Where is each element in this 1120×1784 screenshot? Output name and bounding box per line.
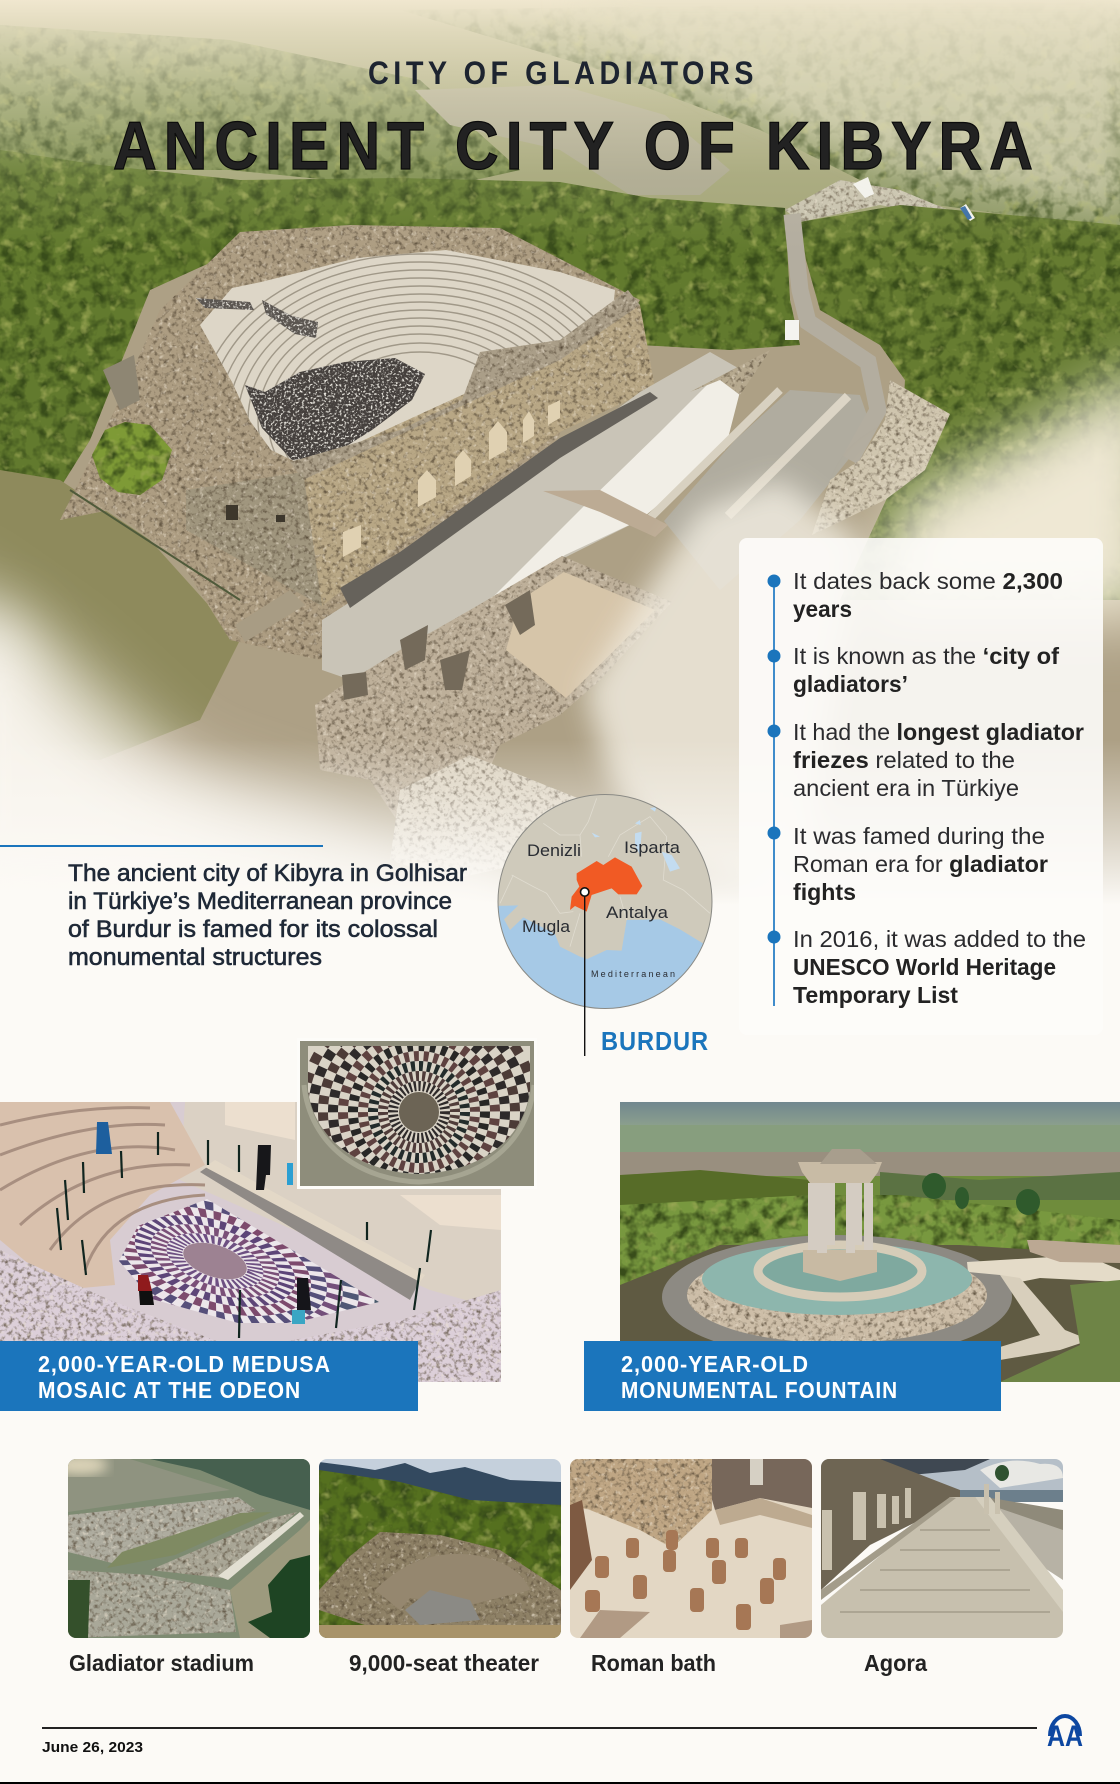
grass (620, 1195, 1120, 1285)
dirt area around the theatre (60, 225, 640, 660)
wooden walkway (543, 490, 668, 537)
horizon land (950, 1490, 1063, 1502)
timeline line (773, 580, 775, 1006)
centre right haze (585, 480, 860, 900)
bottom black bar (0, 1782, 1120, 1784)
main forest left (0, 150, 800, 520)
intro text: in Türkiye’s Mediterranean province (68, 888, 452, 915)
tree (92, 422, 172, 495)
intro text (68, 860, 467, 971)
photo: Roman bath (570, 1459, 812, 1638)
rotunda top (798, 1162, 882, 1183)
intro text: monumental structures (68, 944, 322, 971)
intro text: The ancient city of Kibyra in Golhisar (68, 860, 467, 887)
panel background (739, 538, 1103, 1035)
low walls by road (728, 396, 848, 516)
terrace (506, 572, 655, 698)
wall top rubble (290, 290, 640, 480)
white column stub (750, 1459, 763, 1485)
fact 3 (793, 719, 1084, 801)
town (620, 1152, 1120, 1176)
lakes (592, 807, 680, 872)
timeline dots (768, 574, 780, 944)
upper steps (0, 1102, 205, 1290)
main aerial photo of the odeon and surrounding forest (0, 0, 1120, 920)
upper left wooded slope (0, 25, 520, 190)
frieze wall (200, 1165, 420, 1300)
caption: Medusa mosaic: 2,000-YEAR-OLD MEDUSA (38, 1351, 331, 1377)
map labels: Isparta (624, 838, 681, 857)
arches (343, 400, 560, 557)
land (498, 795, 712, 959)
left wall (821, 1459, 960, 1590)
inner ring (758, 1245, 922, 1297)
map labels: Mediterranean (591, 969, 675, 979)
people (96, 1122, 112, 1154)
pedestal (803, 1250, 877, 1281)
near hill left (620, 1170, 810, 1205)
curved border of the dome (304, 1085, 534, 1182)
wall right face (303, 305, 655, 606)
mosaic semicircle (308, 1046, 530, 1174)
east seating (150, 1512, 297, 1578)
map outline (498, 794, 712, 1008)
right curb (975, 1497, 1063, 1612)
columns (822, 1484, 1000, 1570)
ruins right (967, 1255, 1120, 1282)
map labels (522, 838, 681, 979)
wall shadow strip (340, 392, 658, 608)
far hillside (0, 0, 1120, 240)
seating tiers (375, 1554, 530, 1610)
photo: Medusa mosaic at the odeon (0, 1102, 501, 1394)
right wall (985, 1497, 1063, 1535)
top haze (0, 0, 1120, 250)
fact 1: It dates back some 2,300 (793, 568, 1063, 594)
sea (498, 905, 703, 1008)
plaza floor (180, 1102, 501, 1310)
rock pile (103, 355, 140, 410)
tree (995, 1465, 1009, 1481)
stone wall (570, 1459, 712, 1548)
grass base (620, 1176, 1120, 1285)
caption: Agora: Agora (864, 1650, 927, 1676)
caption: Medusa mosaic (0, 1341, 418, 1411)
ruin shadows (342, 590, 535, 700)
grass lower-left (0, 470, 240, 760)
fact 3: ancient era in Türkiye (793, 775, 1019, 801)
Burdur label: BURDUR (601, 1028, 709, 1056)
photo: monumental fountain (620, 1102, 1120, 1382)
dome (820, 1149, 877, 1164)
map labels: Mugla (522, 917, 571, 936)
fact 5 (793, 926, 1086, 1008)
right gravel (990, 1505, 1063, 1580)
panel: key facts (739, 538, 1103, 1035)
upper crowd (196, 298, 318, 338)
infield (107, 1512, 272, 1568)
lower haze left (0, 620, 530, 1120)
intro text: of Burdur is famed for its colossal (68, 916, 438, 943)
AA logo: AA (1047, 1720, 1083, 1753)
footer rule (42, 1727, 1037, 1729)
valley fields (620, 1125, 1120, 1152)
locator map (498, 794, 712, 1009)
columns (808, 1183, 873, 1253)
accent line above intro (0, 845, 323, 847)
parked vehicles (785, 177, 975, 340)
caption: 9,000-seat theater: 9,000-seat theater (349, 1650, 539, 1676)
fact 5: In 2016, it was added to the (793, 926, 1086, 952)
fact 3: It had the longest gladiator (793, 719, 1084, 745)
rubble curve (715, 1498, 812, 1528)
parked area rubble (785, 180, 985, 225)
plaza (322, 352, 745, 690)
caption: Medusa mosaic: MOSAIC AT THE ODEON (38, 1377, 301, 1403)
caption: monumental fountain: MONUMENTAL FOUNTAIN (621, 1377, 898, 1403)
fact 4 (793, 823, 1048, 905)
hypocaust pillars (585, 1530, 786, 1630)
photo: 9,000-seat theater (319, 1459, 561, 1638)
sky (821, 1459, 1063, 1499)
paved street (821, 1497, 1063, 1638)
ruin rubble complex (315, 556, 672, 855)
road (792, 214, 878, 460)
fact 4: fights (793, 879, 856, 905)
kicker heading: CITY OF GLADIATORS (368, 55, 758, 91)
forest hill (319, 1470, 561, 1638)
dark trees right (248, 1555, 310, 1638)
bright plaza highlight (490, 372, 745, 600)
bottom stones (580, 1610, 812, 1638)
lower ground (620, 1245, 1120, 1382)
map labels: Antalya (606, 903, 669, 922)
solid lower background (0, 904, 1120, 1784)
rubble orchestra (405, 1590, 480, 1625)
caption: Roman bath: Roman bath (591, 1650, 716, 1676)
mountains (319, 1462, 561, 1505)
stanchions (57, 1132, 431, 1338)
sky and mountains (620, 1102, 1120, 1125)
fact 1 (793, 568, 1063, 622)
caption: monumental fountain: 2,000-YEAR-OLD (621, 1351, 809, 1377)
fountain outer wall (687, 1272, 987, 1341)
left curb (821, 1497, 956, 1600)
west ruins (68, 1570, 236, 1638)
province borders (500, 798, 710, 947)
mosaic floor (119, 1199, 379, 1323)
lower white blocks (390, 755, 620, 880)
upper right hazy forest (400, 0, 1120, 230)
lower lavender steps (0, 1250, 501, 1382)
fact 3: friezes related to the (793, 747, 1015, 773)
seating slope (68, 1497, 256, 1563)
right haze over forest (860, 360, 1120, 620)
distant green hills (150, 1459, 310, 1510)
upper right extra haze (560, 0, 1120, 210)
cypress trees (922, 1173, 1040, 1215)
gravel path (662, 1235, 1012, 1341)
bottom fade (0, 740, 1120, 905)
fact 5: UNESCO World Heritage (793, 954, 1056, 980)
far stadium (415, 85, 730, 195)
theatre bowl (319, 1532, 561, 1634)
near hill right (880, 1172, 1120, 1200)
sun glow (52, 1455, 108, 1475)
inset photo: Medusa mosaic close-up (297, 1041, 534, 1189)
Burdur pointer line and marker (580, 888, 589, 1056)
dirt background (700, 1459, 812, 1510)
wall windows (226, 505, 285, 522)
caption: monumental fountain (584, 1341, 1001, 1411)
main forest right (800, 205, 1120, 600)
photo: agora (821, 1459, 1063, 1638)
fact 2 (793, 643, 1059, 697)
main crowd (245, 358, 425, 460)
lower left shrub (68, 1580, 90, 1638)
fact 2: It is known as the ‘city of (793, 643, 1059, 669)
pool (702, 1243, 972, 1315)
fact 5: Temporary List (793, 982, 958, 1008)
flagstone joints (840, 1530, 1050, 1612)
fence and shadow (70, 490, 240, 600)
fact 4: It was famed during the (793, 823, 1045, 849)
date: June 26, 2023 (42, 1739, 143, 1756)
ground base (0, 0, 1120, 920)
fact 2: gladiators’ (793, 671, 908, 697)
east wall (218, 1512, 304, 1580)
lower left soft haze (0, 560, 420, 920)
grey service area (664, 390, 872, 590)
map labels: Denizli (527, 841, 581, 860)
Burdur province (570, 857, 642, 912)
fact 4: Roman era for gladiator (793, 851, 1048, 877)
cavea seating (200, 250, 615, 461)
steps at base (235, 590, 305, 642)
foreground sand (319, 1625, 561, 1638)
right slope (230, 1520, 310, 1638)
caption: Gladiator stadium: Gladiator stadium (69, 1650, 254, 1676)
photo: gladiator stadium (52, 1455, 310, 1638)
back marble blocks (225, 1102, 501, 1230)
sunlit slope (68, 1459, 230, 1512)
wall left face (186, 472, 322, 606)
dark left wall (570, 1500, 592, 1590)
stone block field beside road (812, 380, 950, 535)
fact 1: years (793, 596, 852, 622)
